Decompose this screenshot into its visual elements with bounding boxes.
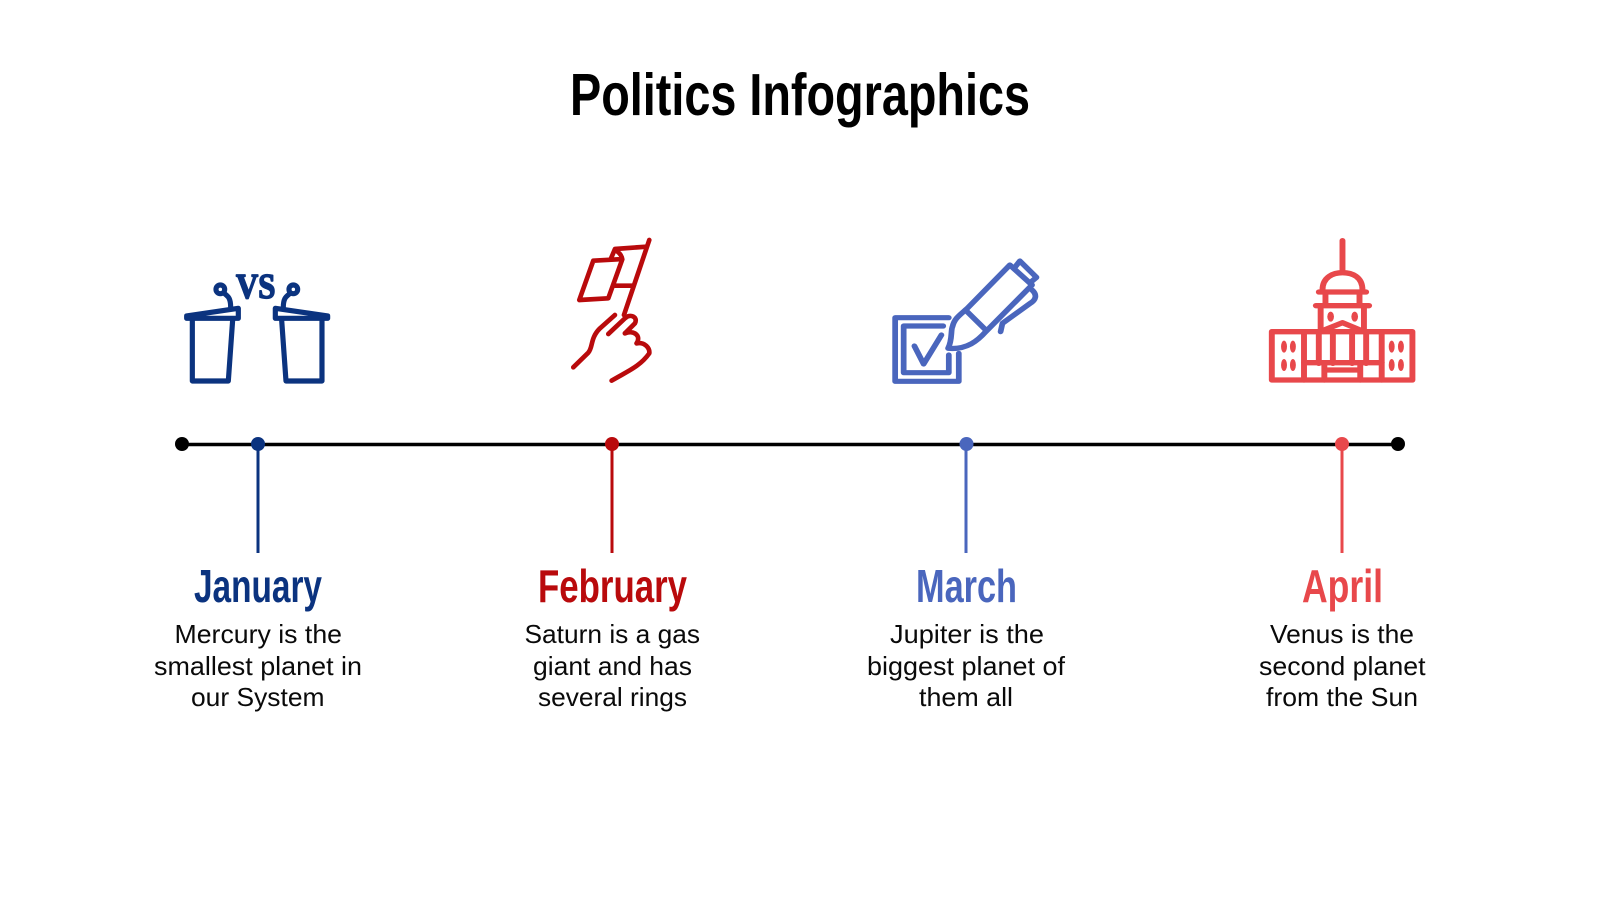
icon: debate podiums [187,268,328,381]
text: April: second planet [1259,651,1426,681]
text: April [1259,619,1426,712]
panel: January [154,268,362,712]
marker: January [251,437,265,553]
marker: March [960,437,974,553]
text: January: our System [191,682,324,712]
text: March: biggest planet of [867,651,1066,681]
text: March: Jupiter is the [890,619,1044,649]
text: April: from the Sun [1266,682,1418,712]
title: Politics Infographics [570,62,1030,128]
text: March [867,619,1066,712]
text: April: Venus is the [1270,619,1414,649]
icon: pen and ballot checkbox [895,261,1036,381]
text: February [524,619,700,712]
text: January [154,619,362,712]
heading: January: January [194,560,322,612]
icon: capitol building [1272,241,1412,380]
panel: April [1259,241,1426,712]
icon: debate podiums: VS [236,268,275,306]
text: February: giant and has [533,651,692,681]
marker: February [605,437,619,553]
timeline axis [175,437,1405,451]
heading: February: February [538,560,687,612]
panel: February [524,240,700,712]
text: February: several rings [538,682,687,712]
marker: April [1335,437,1349,553]
icon: hand holding flag [573,240,649,381]
panel: March [867,261,1066,712]
heading: April: April [1302,560,1383,612]
text: March: them all [919,682,1013,712]
text: January: smallest planet in [154,651,362,681]
heading: March: March [916,560,1017,612]
text: January: Mercury is the [174,619,342,649]
text: February: Saturn is a gas [524,619,700,649]
